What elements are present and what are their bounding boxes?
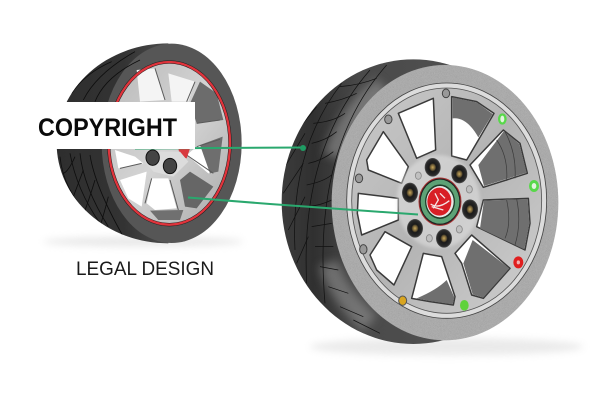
big wheel hub cap with red logo <box>419 178 461 225</box>
small wheel sidewall <box>102 44 242 243</box>
green arrow tip on tyre <box>300 145 306 151</box>
big wheel small studs <box>415 172 472 242</box>
big wheel tread highlights <box>328 87 383 323</box>
small wheel rim face <box>109 62 230 224</box>
green connector line to tyre <box>135 148 303 149</box>
small wheel red rim ring <box>109 62 230 225</box>
big wheel rim lip <box>347 83 547 318</box>
green connector line to hub <box>188 198 418 214</box>
big wheel barrel detail lines <box>497 132 519 245</box>
big wheel tread <box>282 59 545 344</box>
small wheel tread grooves <box>60 52 140 237</box>
legal design caption: LEGAL DESIGN <box>76 259 214 280</box>
big wheel lug nuts <box>402 158 478 248</box>
big wheel centre highlight <box>397 155 480 248</box>
copyright watermark text: COPYRIGHT <box>38 114 177 142</box>
small wheel barrel and windows <box>115 68 223 220</box>
small wheel ground shadow <box>43 237 243 246</box>
big wheel rim face <box>352 88 542 313</box>
big wheel grey rim bolts <box>355 89 450 254</box>
small wheel lug nuts <box>145 150 188 177</box>
big wheel inner barrel <box>417 97 529 304</box>
copyright banner <box>55 102 195 149</box>
big wheel coloured rim bolts <box>399 113 539 311</box>
small wheel: legal design <box>43 43 243 246</box>
big wheel windows <box>357 97 530 305</box>
small wheel red brake caliper <box>178 148 190 158</box>
big wheel ground shadow <box>310 338 583 355</box>
small wheel tread <box>57 43 168 243</box>
big wheel tread pattern <box>283 65 387 333</box>
big wheel: copy <box>282 59 583 355</box>
big wheel textured sidewall <box>332 65 558 340</box>
small wheel spokes <box>120 68 220 210</box>
